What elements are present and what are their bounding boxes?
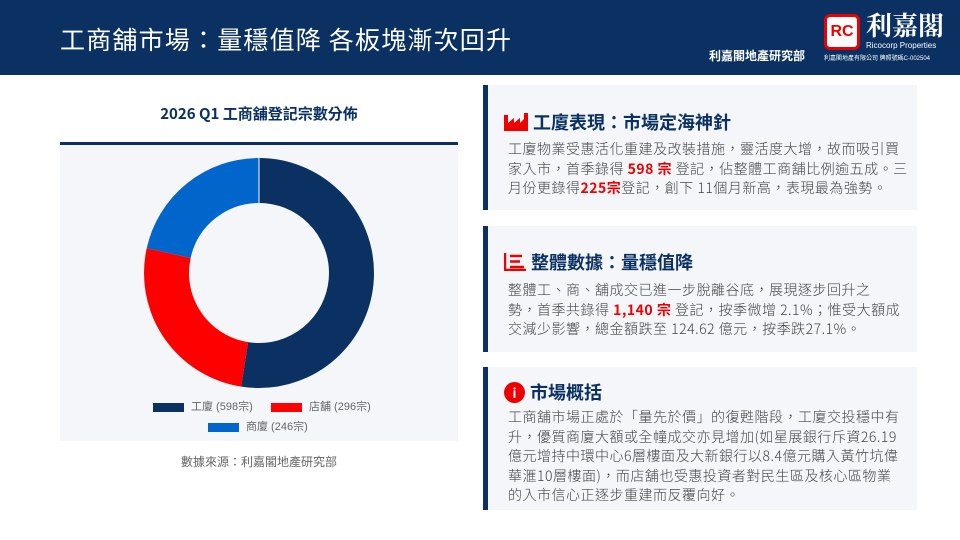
chart panel [60,142,458,441]
source note: 數據來源：利嘉閣地產研究部 [181,455,337,469]
body text: 家入市，首季錄得 598 宗 登記，佔整體工商舖比例逾五成。三 [508,158,908,178]
body text: 升，優質商廈大額或全幢成交亦見增加(如星展銀行斥資26.19 [508,426,897,446]
heading with factory icon: 工廈表現：市場定海神針 [533,109,731,135]
panel: industrial [483,85,917,210]
logo [824,6,944,62]
logo text: 利嘉閣 [866,6,944,43]
body text: 工商舖市場正處於「量先於價」的復甦階段，工廈交投穩中有 [508,407,900,427]
body text: 交減少影響，總金額跌至 124.62 億元，按季跌27.1%。 [508,319,861,339]
body text: 工廈物業受惠活化重建及改裝措施，靈活度大增，故而吸引買 [508,139,900,159]
heading with chart icon: 整體數據：量穩值降 [531,249,693,275]
body text [508,280,900,339]
title: 工商舖市場：量穩值降 各板塊漸次回升 [60,21,512,57]
panel: overall data [483,226,917,352]
body text: 整體工、商、舖成交已進一步脫離谷底，展現逐步回升之 [508,280,870,300]
body text [508,407,900,505]
body text: 的入市信心正逐步重建而反覆向好。 [508,485,740,505]
chart panel: 店舖 (296宗) [309,401,371,413]
header bar [0,0,960,75]
heading with info icon: 市場概括 [530,379,602,405]
icon: logo mark [824,14,860,50]
chart heading: 2026 Q1 工商舖登記宗數分佈 [160,103,358,124]
donut chart [144,158,374,388]
body text: 華滙10層樓面)，而店舖也受惠投資者對民生區及核心區物業 [508,466,891,486]
header subtitle: 利嘉閣地產研究部 [709,49,805,63]
body text: 月份更錄得225宗登記，創下 11個月新高，表現最為強勢。 [508,178,887,198]
heading with info icon: i [513,382,516,402]
body text: 億元增持中環中心6層樓面及大新銀行以8.4億元購入黃竹坑偉 [508,446,898,466]
logo: Ricocorp Properties [866,41,936,50]
legend [153,400,371,433]
body text [508,139,908,198]
chart panel: 工廈 (598宗) [191,401,253,413]
logo: 利嘉閣地產有限公司 牌照號碼C-002504 [824,56,930,62]
chart panel: 商廈 (246宗) [246,421,308,433]
body text: 勢，首季共錄得 1,140 宗 登記，按季微增 2.1%；惟受大額成 [508,300,900,320]
icon: logo mark: RC [830,23,854,40]
panel: market summary [483,367,917,510]
